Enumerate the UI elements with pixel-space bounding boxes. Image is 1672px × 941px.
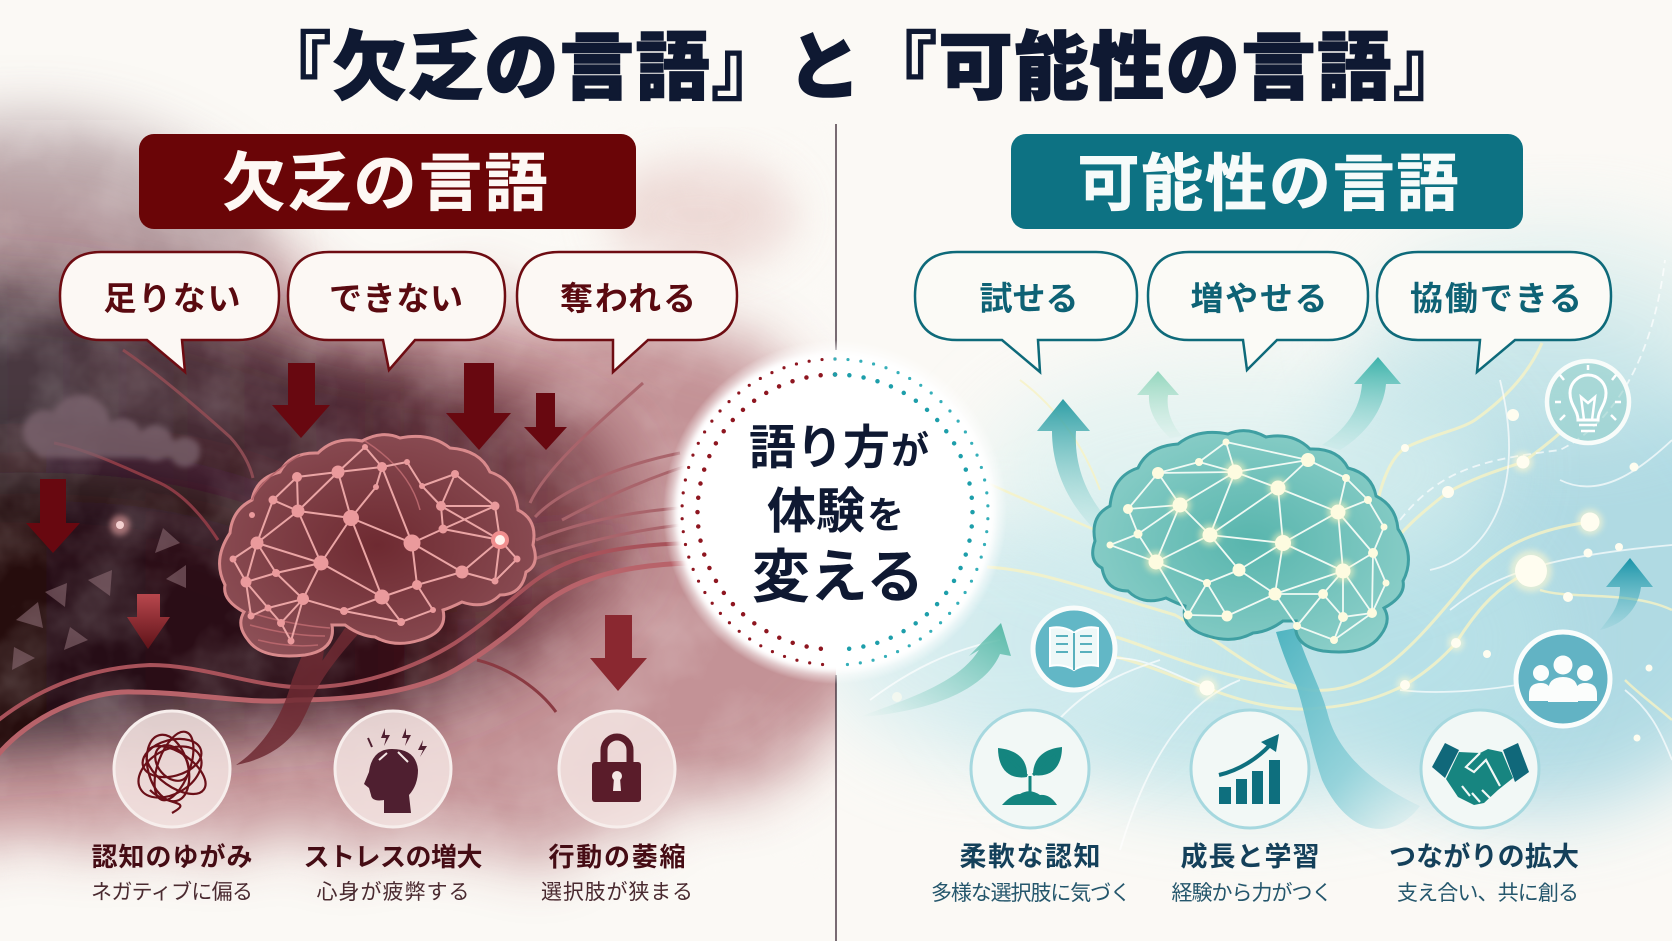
panel: right effect 1 — [931, 710, 1131, 905]
panel: right effect 3: 支え合い、共に創る — [1397, 882, 1579, 905]
panel: right effect 1: 柔軟な認知 — [960, 842, 1100, 872]
triangles: shards — [12, 528, 186, 670]
panel: left effect 2 — [304, 711, 482, 904]
glowing nodes on flow lines — [892, 409, 1652, 742]
icon: open book — [1033, 608, 1115, 690]
panel: right effect 1: 多様な選択肢に気づく — [931, 882, 1131, 905]
panel header: 可能性の言語 — [1011, 134, 1523, 229]
icon: people — [1516, 632, 1610, 726]
speech bubble: 奪われる — [517, 252, 737, 372]
icon: growth chart — [1191, 710, 1309, 828]
speech bubble: 足りない — [60, 252, 279, 372]
waves — [0, 350, 696, 757]
arrow: up curved 4 — [859, 623, 1011, 717]
panel: left effect 3: 選択肢が狭まる — [541, 881, 693, 904]
panel: right effect 2 — [1172, 710, 1332, 905]
speech bubble: 試せる — [915, 252, 1137, 372]
panel: right effect 2: 成長と学習 — [1180, 842, 1320, 872]
brain: left stem — [236, 628, 360, 765]
icon: padlock — [559, 711, 675, 827]
speech bubble: 協働できる: 協働できる — [1410, 280, 1582, 317]
icon: handshake — [1421, 710, 1539, 828]
background: right teal washes — [820, 220, 1672, 850]
panel header: 欠乏の言語 — [139, 134, 636, 229]
cloud: dark left — [23, 395, 200, 467]
speech bubble: できない: できない — [329, 280, 463, 317]
panel: left effect 1 — [91, 711, 253, 904]
title: 『欠乏の言語』と『可能性の言語』 — [257, 26, 1467, 109]
center circle: 変える — [752, 545, 924, 610]
center circle: 語り方が — [749, 421, 929, 474]
panel: left effect 1: 認知のゆがみ — [92, 842, 252, 872]
arrow: up curved 3 — [1322, 357, 1401, 450]
panel: right effect 3: つながりの拡大 — [1389, 841, 1579, 872]
panel: left effect 1: ネガティブに偏る — [91, 881, 253, 904]
center circle: 体験を — [767, 485, 904, 539]
speech bubble: 増やせる — [1148, 252, 1368, 370]
arrow: up curved 5 — [1600, 558, 1653, 630]
arrow: down 6 — [590, 615, 647, 691]
panel: left effect 3 — [541, 711, 693, 904]
arrow: down 5 — [127, 594, 170, 649]
arrow: down 2 — [446, 363, 511, 450]
brain: right stem — [1276, 628, 1420, 829]
flowing lines — [960, 343, 1672, 720]
panel: right effect 3 — [1389, 710, 1579, 905]
speech bubble: できない — [288, 252, 505, 370]
sparkle — [110, 515, 130, 535]
panel: right effect 2: 経験から力がつく — [1172, 882, 1332, 905]
panel header: 欠乏の言語: 欠乏の言語 — [222, 149, 548, 219]
arrow: up curved 1 — [1037, 399, 1108, 530]
background: left dark clouds — [0, 119, 870, 880]
panel header: 可能性の言語: 可能性の言語 — [1078, 150, 1458, 219]
icon: lightbulb — [1547, 361, 1629, 443]
panel: left effect 2: ストレスの増大 — [304, 842, 482, 872]
arrow: up curved 2 — [1137, 371, 1182, 438]
arrow: down 4 — [26, 479, 80, 553]
icon: sprout — [971, 710, 1089, 828]
icon: stressed head — [335, 711, 451, 827]
arrow: down 3 — [524, 393, 567, 450]
speech bubble: 増やせる: 増やせる — [1190, 280, 1328, 317]
speech bubble: 試せる: 試せる — [980, 280, 1078, 317]
speech bubble: 協働できる — [1377, 252, 1611, 372]
arrow: down 1 — [272, 363, 330, 438]
panel: left effect 2: 心身が疲弊する — [316, 881, 470, 904]
speech bubble: 足りない: 足りない — [104, 280, 240, 317]
panel: left effect 3: 行動の萎縮 — [548, 842, 686, 872]
speech bubble: 奪われる: 奪われる — [560, 280, 696, 317]
center circle — [663, 340, 1007, 684]
brain: left with network — [220, 435, 535, 656]
divider line — [835, 124, 837, 941]
brain: right with network — [1093, 431, 1408, 652]
icon: tangled thread — [114, 711, 230, 827]
